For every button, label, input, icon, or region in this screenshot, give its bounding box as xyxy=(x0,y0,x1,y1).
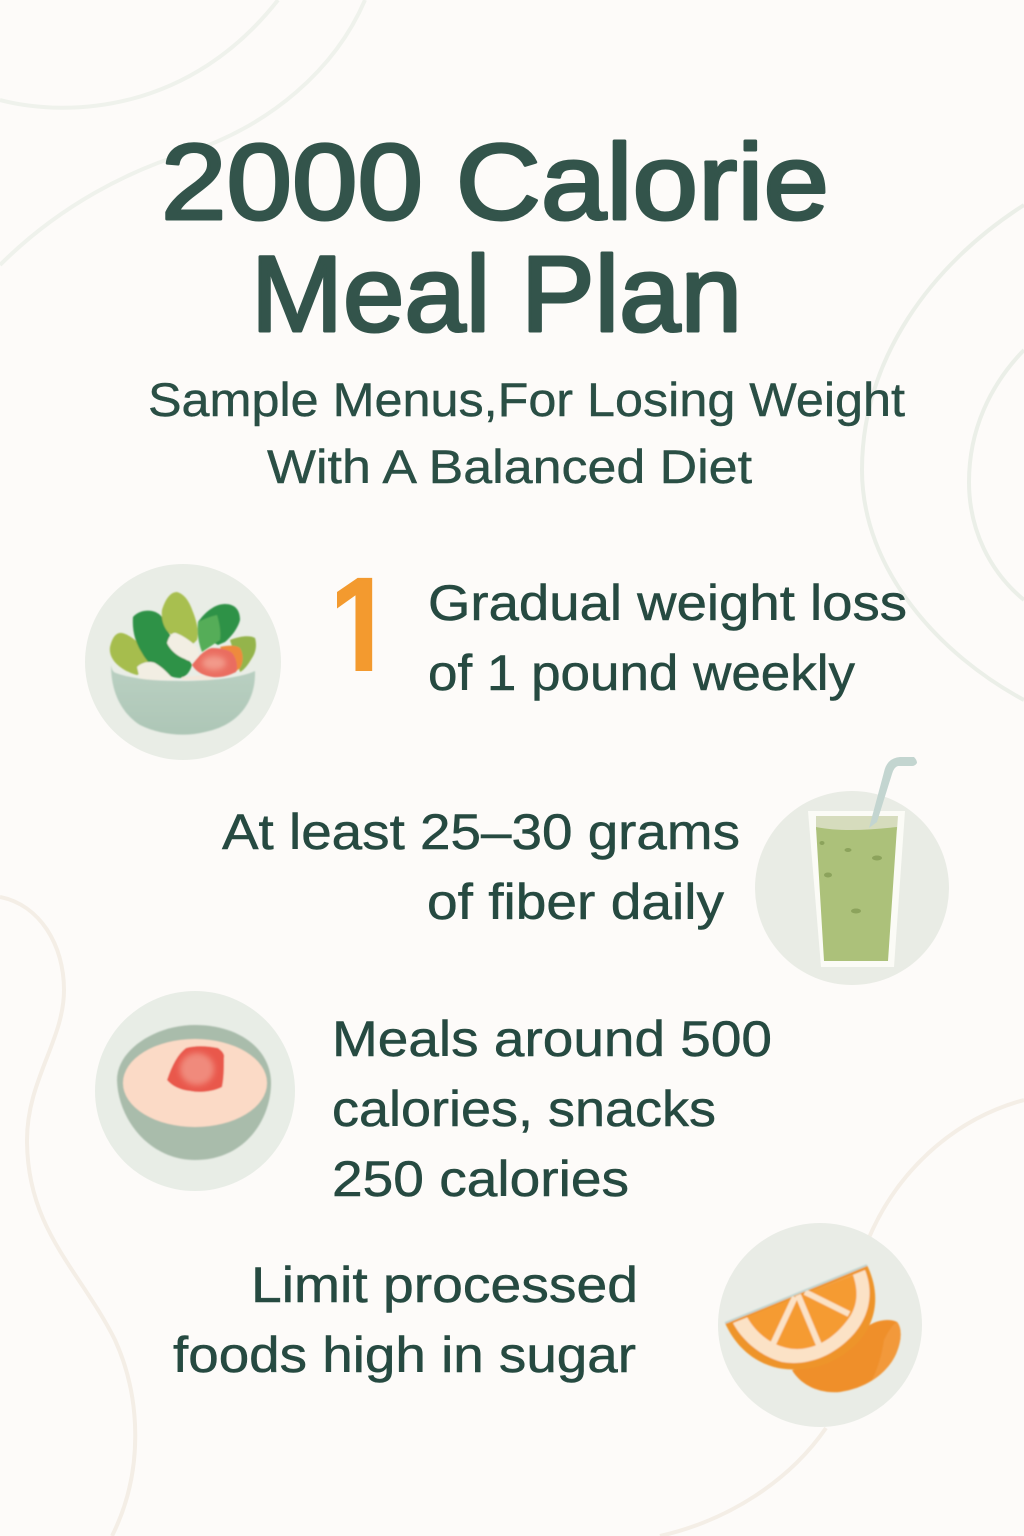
title: 2000 Calorie xyxy=(161,121,829,242)
icon: oatmeal bowl xyxy=(95,991,295,1191)
point 3 text: Meals around 500 xyxy=(332,1011,772,1067)
title: Meal Plan xyxy=(251,233,742,354)
point 1 text: Gradual weight loss xyxy=(428,575,907,631)
point 3 text: 250 calories xyxy=(332,1151,629,1207)
icon: orange slices xyxy=(718,1223,922,1427)
subtitle xyxy=(148,373,905,493)
point 1 text: of 1 pound weekly xyxy=(428,645,855,701)
point 4 text: Limit processed xyxy=(251,1257,638,1313)
point 3 text xyxy=(332,1011,772,1207)
point 2 text: At least 25–30 grams xyxy=(222,804,740,860)
point 3 text: calories, snacks xyxy=(332,1081,716,1137)
point 1 text xyxy=(428,575,907,701)
icon part: straw xyxy=(869,757,917,828)
subtitle: With A Balanced Diet xyxy=(267,440,752,493)
number one: 1 xyxy=(318,546,404,719)
title xyxy=(161,121,829,354)
icon: salad bowl xyxy=(85,564,281,760)
point 4 text xyxy=(173,1257,638,1383)
point 4 text: foods high in sugar xyxy=(173,1327,636,1383)
point 2 text: of fiber daily xyxy=(427,874,724,930)
point 2 text xyxy=(222,804,740,930)
icon: green smoothie xyxy=(755,757,949,985)
subtitle: Sample Menus,For Losing Weight xyxy=(148,373,905,426)
